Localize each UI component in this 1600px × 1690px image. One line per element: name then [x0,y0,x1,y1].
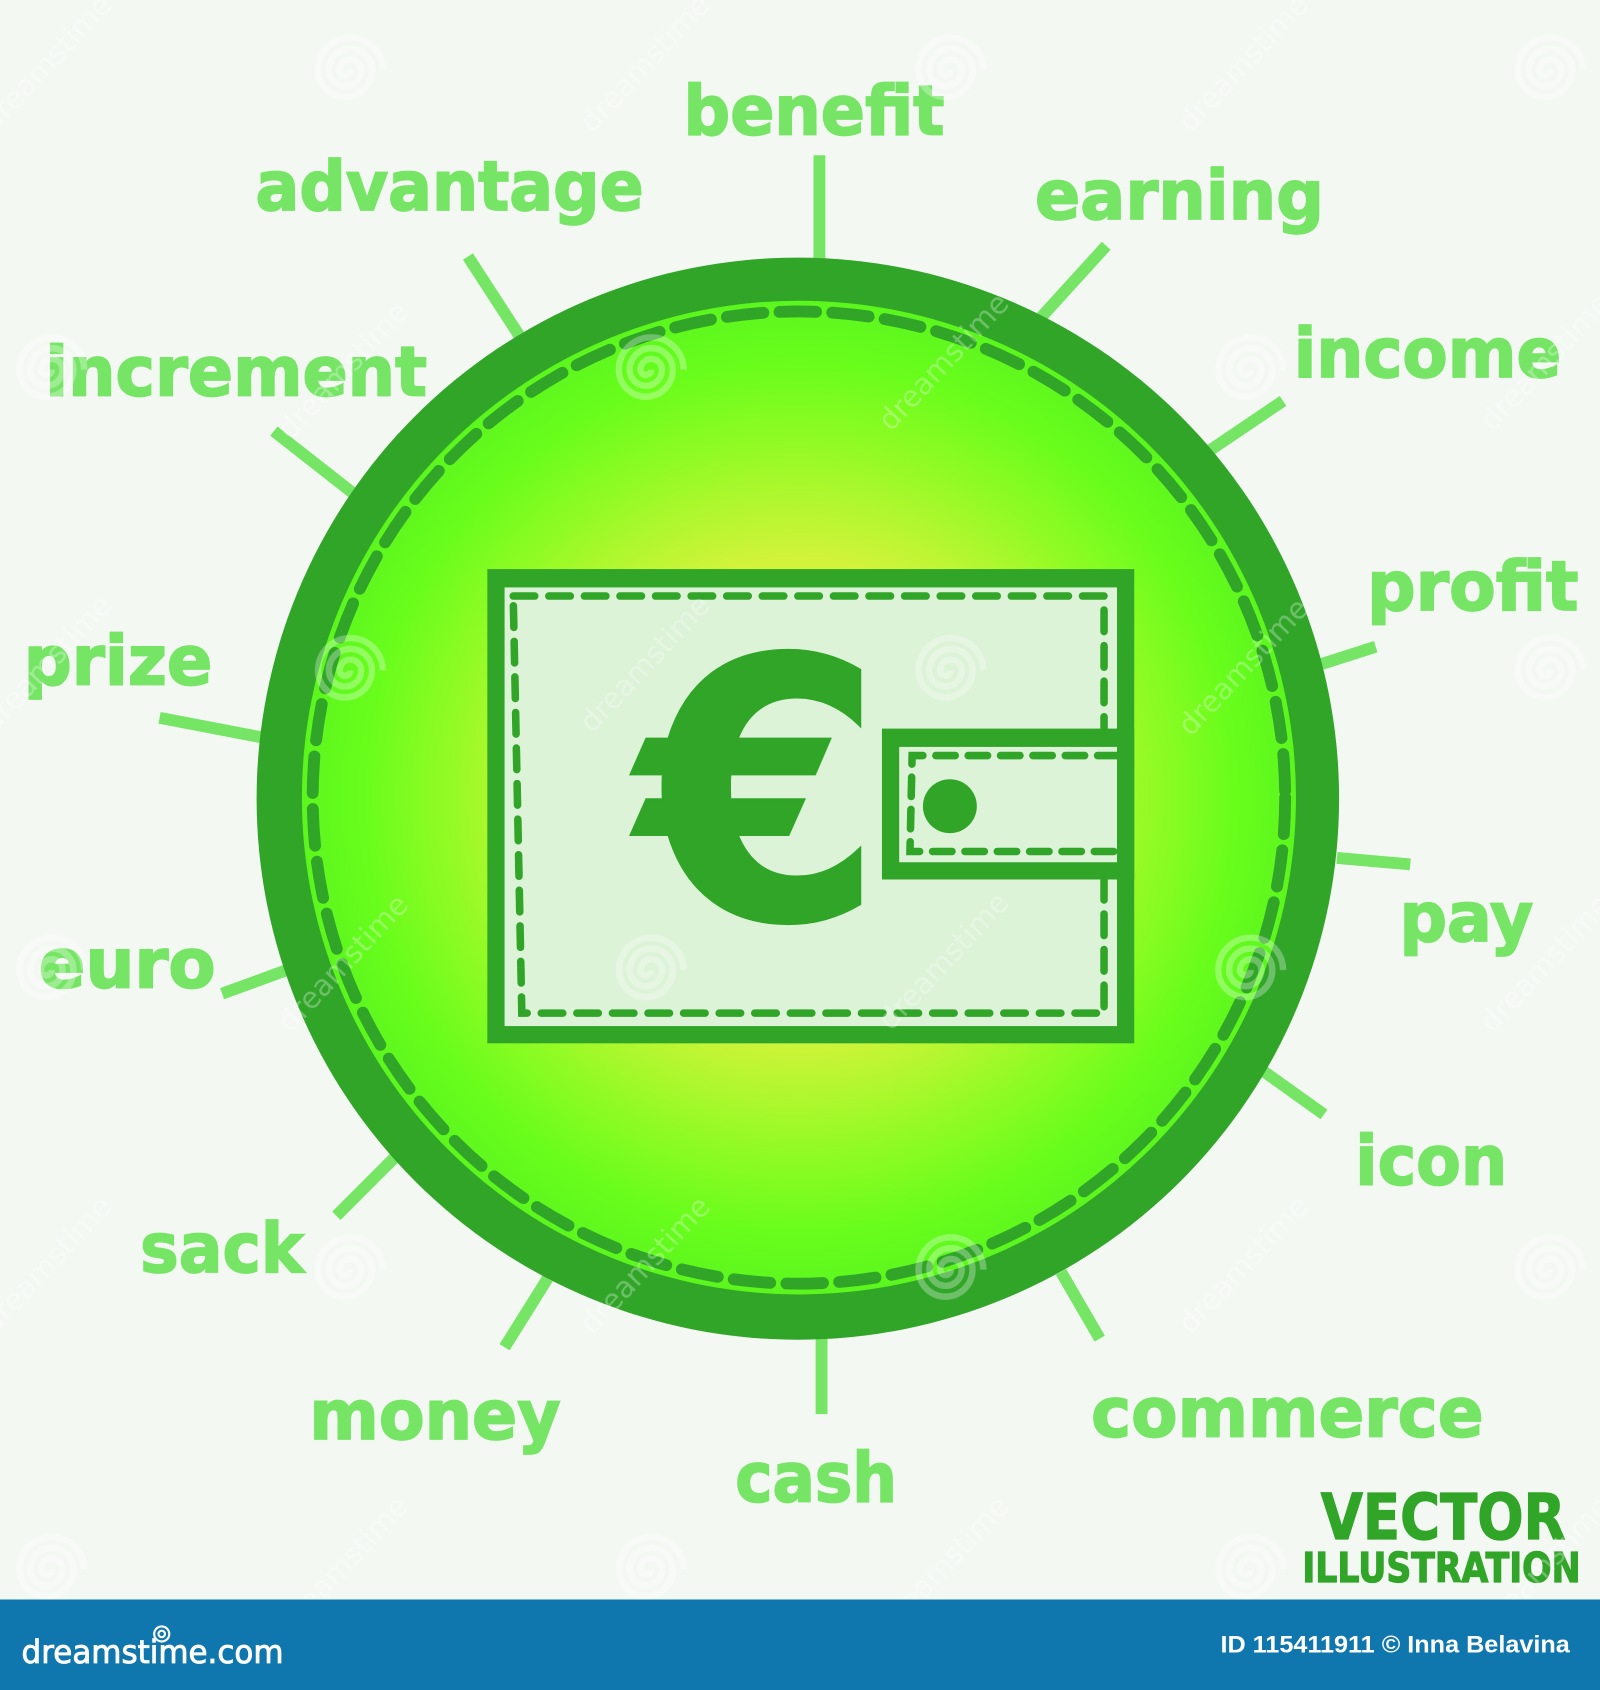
keyword labels: prize [24,621,212,701]
icon: wallet [487,569,1134,1043]
watermark spirals and text: dreamstime [271,888,415,1039]
icon: wallet clasp [882,729,1134,879]
keyword labels: pay [1399,878,1533,958]
keyword labels: sack [140,1209,306,1289]
footer bar [0,1599,1600,1690]
keyword labels: icon [1355,1122,1507,1202]
vector illustration stamp: VECTOR [1321,1480,1565,1554]
footer credit: ID 115411911 © Inna Belavina [1220,1632,1571,1658]
keyword labels: advantage [256,147,644,227]
keyword labels: profit [1367,547,1578,627]
badge: green circle [257,258,1339,1340]
watermark spirals and text: dreamstime [872,886,1016,1037]
keyword labels: earning [1035,156,1324,236]
vector illustration stamp [1302,1480,1581,1592]
watermark spirals and text: dreamstime [271,295,415,446]
keyword labels: cash [735,1438,897,1518]
watermark spirals and text: dreamstime [1171,1190,1315,1340]
footer logo text: dreamstime.com [22,1633,284,1671]
watermark spirals and text: dreamstime [573,1190,717,1340]
keyword labels: money [309,1376,561,1456]
watermark spirals and text: dreamstime [271,1489,415,1640]
footer logo spiral [154,1626,169,1641]
radial keyword ticks [160,155,1410,1414]
watermark spirals and text: dreamstime [872,1489,1016,1640]
keyword labels: benefit [684,72,944,152]
keyword labels: increment [45,333,427,413]
watermark spirals and text: dreamstime [573,588,717,739]
watermark spirals and text: dreamstime [872,286,1016,437]
keyword labels: euro [39,924,216,1004]
keyword labels: income [1294,314,1561,394]
watermark spirals and text: dreamstime [1171,591,1315,742]
keyword labels: commerce [1091,1374,1484,1454]
icon: euro symbol: € [627,584,883,1004]
